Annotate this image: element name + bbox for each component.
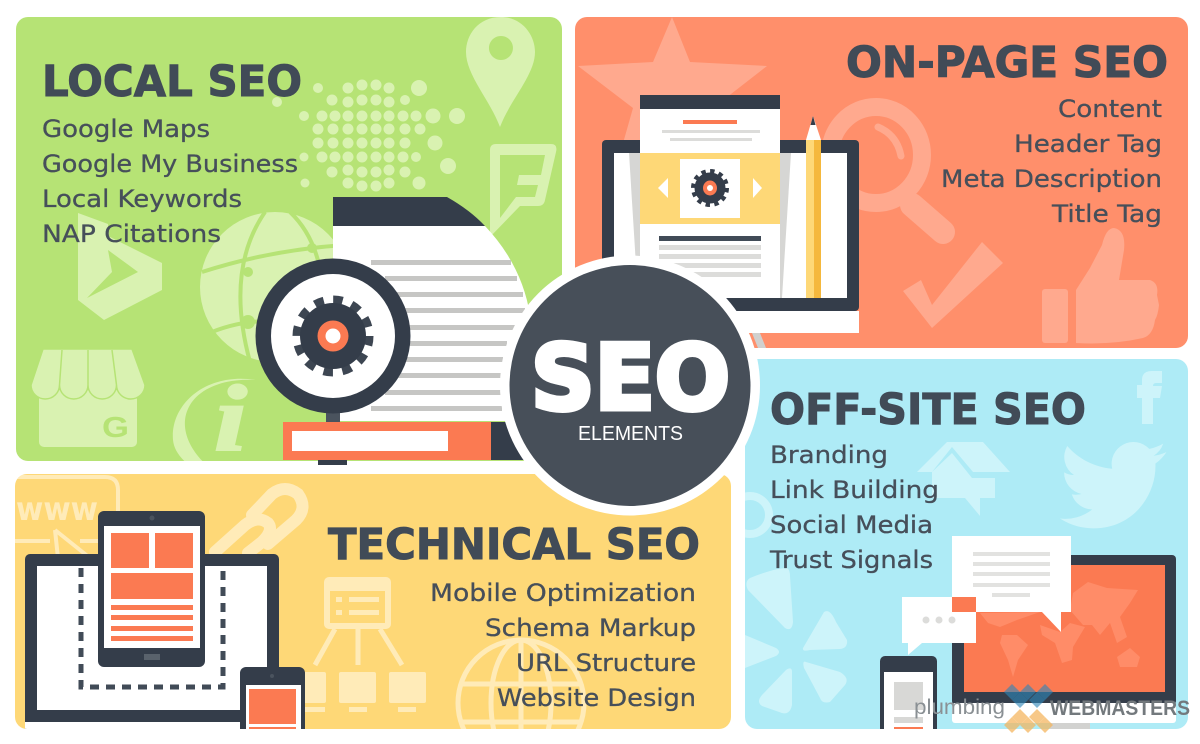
icon: check mark	[903, 242, 1003, 328]
list: off-site seo: Branding	[770, 441, 888, 469]
list: local seo: Google Maps	[42, 115, 210, 143]
tablet	[98, 511, 205, 667]
icon: google my business store	[31, 349, 145, 447]
icon: map pin	[466, 17, 535, 127]
ghost icons: local	[31, 17, 556, 471]
logo: plumbing webmasters: plumbing	[914, 696, 1005, 719]
icon: info crescent: i	[214, 367, 247, 471]
panel: local seo	[16, 17, 562, 471]
icon: magnifier	[830, 107, 943, 232]
icon: home chat	[917, 442, 1010, 516]
document illustration	[333, 197, 530, 421]
icon: google my business store: G	[102, 412, 129, 444]
ghost icons: on-page	[578, 17, 1159, 343]
list: technical seo: Website Design	[497, 684, 696, 712]
map continents	[980, 582, 1140, 677]
icon: star	[578, 18, 767, 140]
center badge: seo elements: ELEMENTS	[578, 423, 683, 445]
icon: dotted map	[272, 80, 465, 192]
list: local seo	[42, 115, 298, 248]
panel: on-page seo	[575, 17, 1188, 348]
logo diamonds	[1004, 684, 1053, 733]
icon: thumbs up	[1042, 228, 1159, 343]
icon: twitter	[1060, 442, 1166, 528]
icon: www browser	[15, 477, 120, 558]
icon: chain link	[215, 489, 303, 553]
icon: globe	[200, 212, 333, 360]
list: technical seo: Schema Markup	[485, 614, 696, 642]
list: local seo: Local Keywords	[42, 185, 242, 213]
panel: technical seo	[15, 474, 731, 744]
icon: globe	[458, 640, 584, 744]
icon: foursquare	[490, 144, 556, 237]
devices illustration	[25, 511, 305, 737]
pencil	[806, 116, 821, 298]
icon: yelp burst	[745, 568, 847, 713]
book base	[283, 410, 531, 465]
list: local seo: Google My Business	[42, 150, 298, 178]
logo: plumbing webmasters: WEBMASTERS	[1050, 697, 1190, 720]
heading: on-page seo: ON-PAGE SEO	[846, 38, 1168, 88]
small chat bubble	[902, 597, 976, 655]
list: technical seo	[430, 579, 696, 712]
phone	[240, 667, 305, 729]
ghost icons: off-site	[731, 371, 1166, 713]
icon: bing	[78, 213, 162, 320]
icon: facebook	[1137, 371, 1162, 424]
heading: local seo: LOCAL SEO	[42, 57, 302, 107]
list: off-site seo	[769, 441, 939, 574]
magnifier with gear	[256, 258, 410, 414]
world map monitor	[952, 555, 1176, 729]
list: off-site seo: Social Media	[770, 511, 933, 539]
panel: off-site seo	[731, 359, 1188, 736]
list: on-page seo: Content	[1058, 95, 1162, 123]
ghost icons: technical	[15, 477, 584, 744]
list: on-page seo: Title Tag	[1051, 200, 1162, 228]
center badge: seo elements	[500, 256, 760, 516]
list: off-site seo: Trust Signals	[769, 546, 933, 574]
laptop	[25, 554, 279, 734]
large chat bubble	[952, 536, 1071, 632]
icon: www browser: www	[16, 490, 98, 528]
phone	[880, 656, 937, 736]
list: technical seo: Mobile Optimization	[430, 579, 696, 607]
list: off-site seo: Link Building	[770, 476, 939, 504]
list: on-page seo: Meta Description	[941, 165, 1162, 193]
icon: ring fragment	[745, 492, 773, 538]
heading: off-site seo: OFF-SITE SEO	[770, 385, 1086, 435]
list: on-page seo	[941, 95, 1162, 228]
list: technical seo: URL Structure	[516, 649, 696, 677]
center badge: seo elements: SEO	[531, 326, 730, 431]
icon: sitemap	[300, 577, 426, 712]
icon: info crescent	[172, 378, 254, 461]
list: local seo: NAP Citations	[42, 220, 221, 248]
monitor illustration	[602, 95, 859, 348]
heading: technical seo: TECHNICAL SEO	[328, 520, 700, 570]
logo: plumbing webmasters	[914, 684, 1190, 733]
page document	[640, 95, 780, 298]
list: on-page seo: Header Tag	[1014, 130, 1162, 158]
